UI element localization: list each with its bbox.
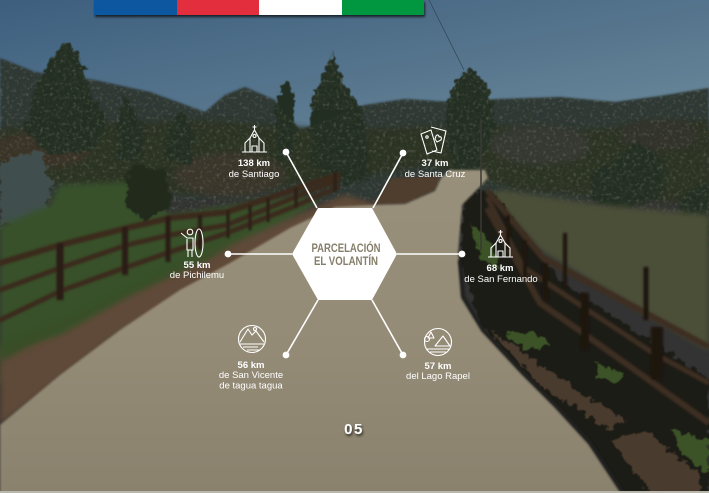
hexagon title: PARCELACIÓN	[312, 242, 380, 255]
destination: Santiago: de Santiago	[229, 169, 279, 180]
icon: playing cards	[421, 127, 446, 154]
trees	[25, 42, 709, 250]
frosted shrub left	[0, 150, 52, 225]
distance label: 138 km	[238, 158, 270, 169]
destination: San Vicente de Tagua Tagua: de tagua tagua	[219, 380, 283, 392]
destination: Lago Rapel: del Lago Rapel	[406, 371, 470, 382]
icon: church	[242, 125, 267, 152]
power line	[429, 0, 464, 70]
dark shrubs left	[125, 165, 172, 222]
distance label: 56 km	[238, 360, 264, 371]
destination: Pichilemu: de Pichilemu	[170, 270, 224, 281]
destination: San Fernando: de San Fernando	[464, 274, 538, 285]
icon: surfer with board	[181, 229, 203, 257]
dirt verge left	[0, 195, 380, 425]
mid forest	[0, 120, 709, 205]
utility pole	[480, 120, 482, 250]
icon: lake and trees	[424, 328, 452, 356]
flag colour bar	[94, 0, 424, 15]
destination: San Vicente de Tagua Tagua: de San Vicente	[219, 370, 283, 381]
distance label: 68 km	[487, 263, 513, 274]
distance label: 55 km	[184, 260, 210, 271]
page number: 05	[344, 421, 364, 438]
grass patches right	[472, 225, 709, 475]
bottom edge	[0, 491, 709, 493]
connector lines and dots	[225, 149, 465, 358]
right field	[490, 190, 709, 350]
icon: mountain lake	[238, 326, 266, 352]
foliage grain	[0, 40, 709, 230]
destination: Santiago	[229, 125, 279, 180]
right wooden fence	[487, 190, 709, 423]
destination: San Vicente de Tagua Tagua	[219, 326, 283, 392]
destination: Lago Rapel	[406, 328, 470, 382]
destination: Santa Cruz: de Santa Cruz	[405, 169, 466, 180]
distance label: 57 km	[425, 361, 451, 372]
road	[0, 170, 623, 493]
road dirt shoulder at the bend	[372, 176, 440, 206]
left wooden fence	[0, 172, 338, 320]
green strip	[0, 238, 240, 362]
destination: Pichilemu	[170, 229, 224, 281]
grass left	[0, 182, 320, 385]
icon: church	[488, 230, 513, 257]
destination: San Fernando	[464, 230, 538, 285]
destination: Santa Cruz	[405, 127, 466, 180]
dirt patches right	[490, 330, 700, 493]
forest brown tones	[0, 119, 700, 197]
distant hills	[0, 58, 709, 200]
distance label: 37 km	[422, 158, 448, 169]
central hexagon: EL VOLANTÍN	[314, 255, 378, 268]
road shadow edge	[460, 260, 623, 493]
sky	[0, 0, 709, 130]
central hexagon	[292, 208, 397, 300]
roadside ditch right	[460, 190, 709, 493]
